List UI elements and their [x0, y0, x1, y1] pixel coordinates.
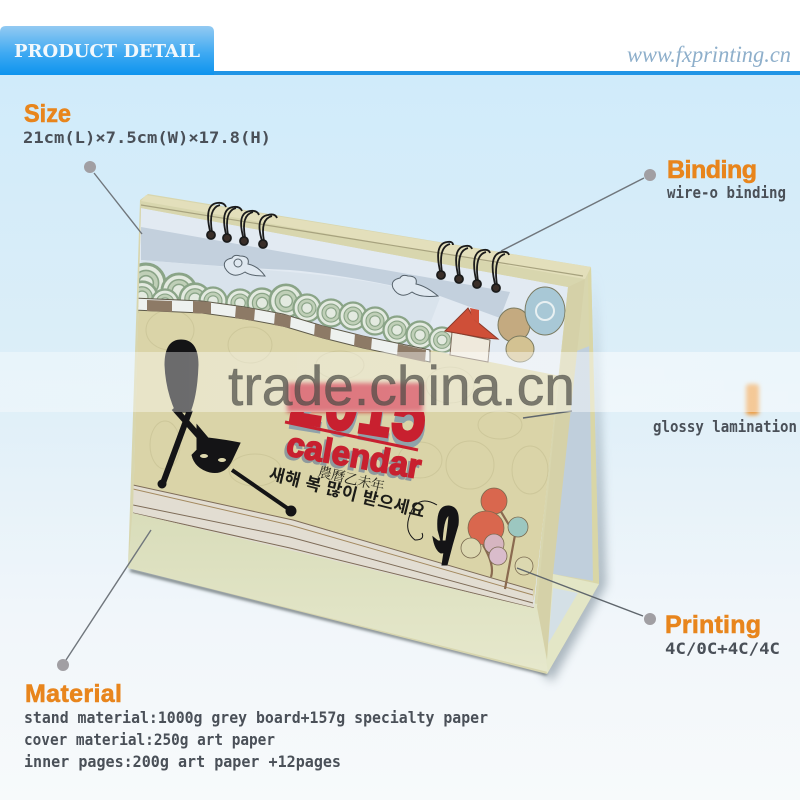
title: PRODUCT DETAIL: [14, 41, 200, 62]
blue tree: [508, 517, 528, 537]
material heading: Material: [25, 680, 122, 708]
outline tree left: [461, 538, 481, 558]
small cat head: [433, 535, 451, 553]
material inner line: inner pages:200g art paper +12pages: [24, 752, 341, 771]
calendar right shadow: [540, 270, 606, 682]
ground faint doodles: [146, 310, 548, 494]
stand front cover: [128, 505, 548, 672]
lamination heading remnant: [746, 384, 759, 415]
printing leader: [517, 568, 643, 616]
watermark: [0, 352, 800, 417]
ground: [133, 300, 560, 600]
grey cloud band: [141, 227, 510, 318]
small cat arch: [438, 506, 458, 565]
calendar bottom shadow: [130, 570, 547, 674]
size dot: [84, 161, 96, 173]
decorative balloons top right: [498, 287, 565, 362]
blue balloon: [525, 287, 565, 335]
tree balloons: [461, 488, 533, 575]
stand inner blue panel: [553, 345, 594, 581]
material dot: [57, 659, 69, 671]
large black cat: [158, 340, 296, 516]
clouds: [224, 255, 438, 296]
stand fold inner: [548, 588, 578, 644]
header bar: [0, 26, 800, 75]
second strip line: [141, 205, 583, 276]
wall bricks: [147, 300, 426, 362]
tree trunks: [483, 510, 515, 589]
small cat curl: [408, 501, 437, 540]
tan balloon: [506, 336, 534, 362]
printing heading: Printing: [665, 611, 761, 639]
back board: [128, 194, 599, 674]
desk calendar illustration: [127, 194, 606, 682]
korean greeting: 새해 복 많이 받으세요: [267, 464, 427, 522]
scallop hills: [127, 264, 455, 353]
bottom stripe lines: [133, 485, 534, 608]
lamination leader: [523, 411, 572, 418]
front page: [127, 208, 568, 610]
left cloud swirl: [234, 259, 242, 267]
left cloud: [224, 255, 265, 276]
size heading: Size: [24, 100, 71, 128]
callout: material: [24, 530, 488, 771]
binding value: wire-o binding: [667, 183, 786, 202]
stand rear edge: [588, 267, 599, 584]
red rule: [285, 422, 418, 450]
lunar year text: 農曆乙未年: [316, 463, 386, 495]
lower sky tint: [141, 260, 440, 350]
pink tree upper: [484, 534, 504, 554]
binding leader: [501, 178, 644, 251]
printing value: 4C/0C+4C/4C: [665, 639, 780, 658]
blue balloon swirl: [536, 302, 554, 320]
2015 digits: 2015: [285, 351, 433, 459]
front side strip: [537, 279, 585, 660]
callout: size: [23, 100, 271, 234]
material leader: [66, 530, 151, 660]
red heading 2015 hidden block: [287, 383, 423, 412]
cat left paw: [158, 480, 166, 488]
callout: printing: [517, 568, 780, 658]
right binding rings: [437, 242, 509, 292]
calendar shadow text: calendar: [281, 428, 422, 489]
left binding rings: [207, 203, 277, 248]
binding heading: Binding: [667, 156, 757, 184]
brown balloon: [498, 308, 530, 342]
right cloud: [392, 275, 438, 296]
callout: lamination: [523, 384, 797, 436]
bottom page stripes: [133, 485, 534, 610]
stand fold: [537, 574, 599, 674]
cat front leg: [232, 470, 290, 510]
header tab: [0, 26, 214, 75]
page sky: [133, 208, 568, 608]
website address: www.fxprinting.cn: [627, 42, 791, 67]
calendar red text: calendar: [284, 425, 424, 486]
wall: [133, 298, 430, 362]
calendar word: [284, 436, 422, 482]
watermark text: trade.china.cn: [228, 354, 575, 417]
printing dot: [644, 613, 656, 625]
cat tail arch: [165, 340, 198, 412]
watermark band: [0, 352, 800, 412]
house roof: [445, 308, 498, 339]
cat head: [192, 425, 240, 472]
chimney: [470, 308, 479, 324]
cat rear leg: [172, 408, 196, 438]
material cover line: cover material:250g art paper: [24, 730, 275, 749]
top layer strips: [141, 195, 591, 279]
cat right paw: [286, 506, 296, 516]
large orange tree: [468, 511, 504, 545]
2015 shadow: 2015: [285, 357, 433, 465]
house: [445, 308, 498, 362]
callout: binding: [501, 156, 786, 251]
pink tree lower: [489, 547, 507, 565]
header rule: [0, 71, 800, 75]
outline tree right: [515, 557, 533, 575]
size value: 21cm(L)×7.5cm(W)×17.8(H): [23, 128, 271, 147]
size leader: [94, 173, 142, 234]
cat eyes: [200, 454, 226, 462]
small black cat: [408, 501, 458, 565]
house wall: [450, 332, 490, 362]
binding dot: [644, 169, 656, 181]
red heading 2015: [288, 412, 425, 448]
top orange tree: [481, 488, 507, 514]
cat crossing leg: [163, 410, 190, 483]
material stand line: stand material:1000g grey board+157g specialty paper: [24, 708, 488, 727]
